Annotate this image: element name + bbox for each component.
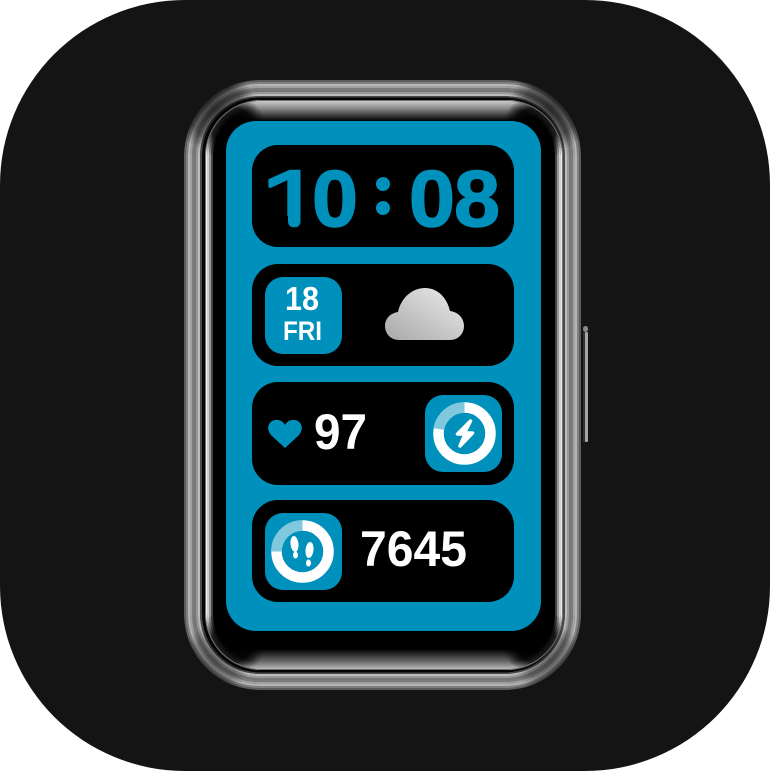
date tile: 18 — [285, 280, 319, 317]
time digits — [268, 170, 498, 228]
step count: 7645 — [360, 521, 467, 577]
icon: steps ring — [265, 513, 342, 590]
watch glass bezel — [198, 94, 570, 676]
time digits: 0 — [409, 154, 455, 243]
time digits: 8 — [454, 154, 500, 243]
panel: date and weather — [252, 264, 514, 366]
screen — [226, 121, 541, 631]
date tile — [265, 277, 342, 354]
icon: battery charge ring — [425, 395, 502, 472]
panel: heart rate and battery — [252, 382, 514, 485]
heart rate value: 97 — [314, 404, 367, 460]
date tile: FRI — [283, 316, 322, 346]
time digits: 0 — [312, 154, 358, 243]
watch metal frame — [173, 68, 592, 696]
panel: steps — [252, 500, 514, 602]
panel: time — [252, 145, 514, 247]
side button — [583, 326, 588, 442]
icon: cloud — [385, 288, 464, 340]
icon: heart — [268, 420, 302, 448]
time digits: 1 — [258, 154, 326, 243]
